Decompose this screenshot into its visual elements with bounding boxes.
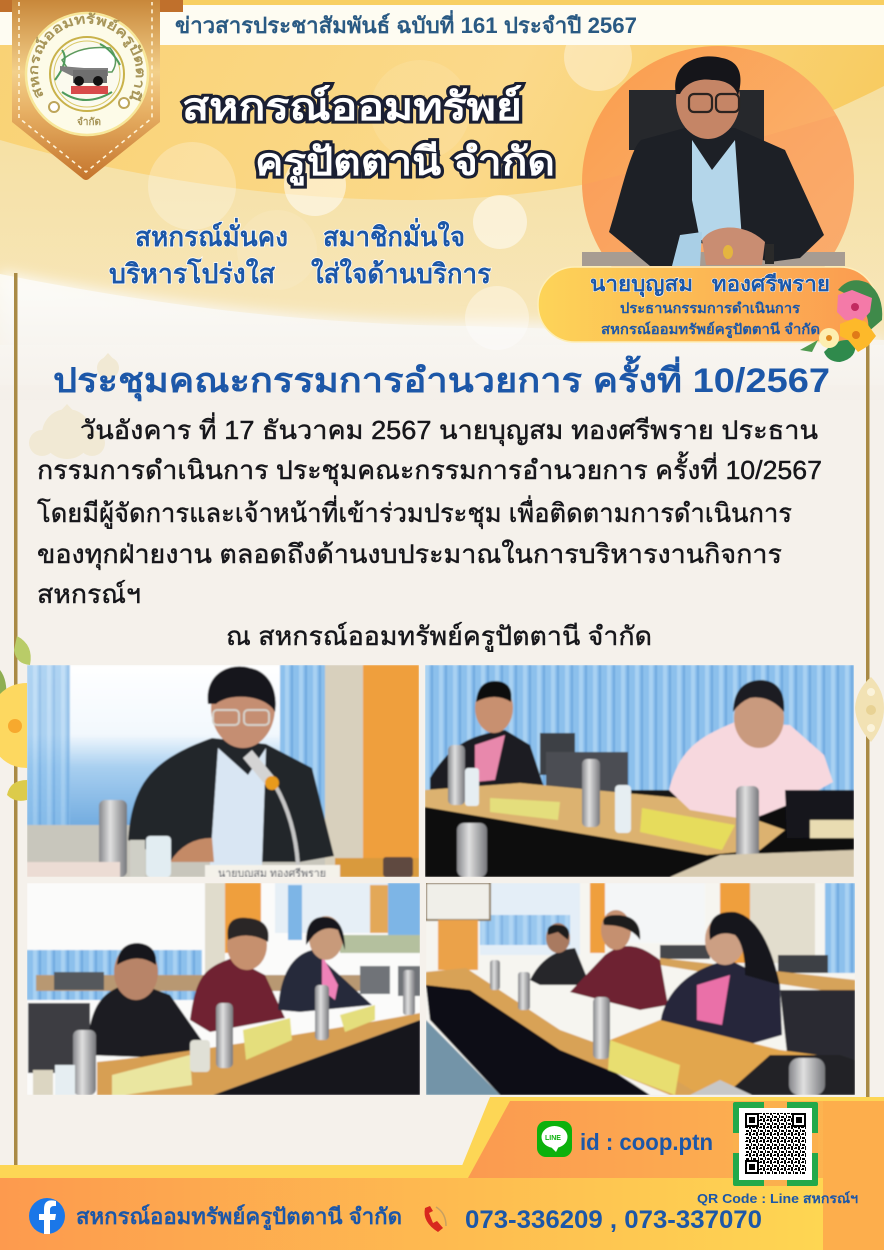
body paragraph: กรรมการดำเนินการ ประชุมคณะกรรมการอำนวยการ ครั้งที่ 10/2567 (37, 451, 822, 486)
slogans (109, 217, 491, 289)
main heading: สหกรณ์ออมทรัพย์ (182, 84, 522, 129)
photo 1: chairman speaking (27, 665, 419, 880)
photo 4: wide view of the table (426, 883, 855, 1095)
QR code (733, 1102, 818, 1186)
icon: tropical flowers (800, 280, 882, 362)
top strip with issue line (0, 0, 884, 45)
meeting title: ประชุมคณะกรรมการอำนวยการ ครั้งที่ 10/2567 (53, 355, 830, 402)
icon: LINE: LINE (545, 1135, 561, 1142)
icon: cooperative seal: สหกรณ์ออมทรัพย์ครูปัตตานี (30, 12, 144, 102)
ornament: faint Thai motifs (29, 353, 119, 459)
ribbon with logo (0, 0, 183, 180)
body paragraph: ของทุกฝ่ายงาน ตลอดถึงด้านงบประมาณในการบริหารงานกิจการ (37, 539, 782, 570)
main heading: ครูปัตตานี จำกัด (255, 141, 555, 186)
phone numbers: 073-336209 , 073-337070 (465, 1206, 762, 1234)
slogans: บริหารโปร่งใส (109, 257, 276, 289)
name pill: สหกรณ์ออมทรัพย์ครูปัตตานี จำกัด (601, 321, 820, 338)
footer: yellow band (0, 1097, 884, 1178)
icon: LINE (537, 1121, 572, 1157)
name pill: นายบุญสม ทองศรีพราย (590, 272, 830, 298)
photo 2: committee members at table (425, 665, 854, 877)
body paragraph: โดยมีผู้จัดการและเจ้าหน้าที่เข้าร่วมประชุม เพื่อติดตามการดำเนินการ (37, 495, 792, 529)
decoration: right ornament (855, 677, 884, 742)
icon: phone (425, 1206, 446, 1232)
slogans: สมาชิกมั่นใจ (323, 217, 465, 252)
slogans: ใส่ใจด้านบริการ (311, 258, 491, 289)
portrait of chairman (582, 46, 854, 266)
icon: Facebook (29, 1198, 65, 1234)
main heading (182, 84, 555, 186)
decoration: left flower (0, 636, 31, 801)
QR caption: QR Code : Line สหกรณ์ฯ (697, 1191, 858, 1206)
photo 3: three attendees (27, 883, 420, 1095)
venue line: ณ สหกรณ์ออมทรัพย์ครูปัตตานี จำกัด (226, 621, 652, 652)
line id: id : coop.ptn (580, 1129, 713, 1155)
body paragraph (37, 412, 822, 609)
name pill (538, 267, 877, 342)
slogans: สหกรณ์มั่นคง (135, 217, 288, 252)
name pill: ประธานกรรมการดำเนินการ (620, 300, 800, 316)
body paragraph: สหกรณ์ฯ (37, 579, 141, 609)
footer: upper orange panel (468, 1101, 884, 1178)
top strip with issue line: ข่าวสารประชาสัมพันธ์ ฉบับที่ 161 ประจำปี 2567 (175, 9, 637, 38)
facebook name: สหกรณ์ออมทรัพย์ครูปัตตานี จำกัด (76, 1204, 402, 1231)
footer: lower orange bar (0, 1101, 884, 1250)
header background (0, 0, 884, 400)
frame lines (14, 273, 870, 1165)
photo 1: chairman speaking: นายบุญสม ทองศรีพราย (218, 867, 326, 880)
body paragraph: วันอังคาร ที่ 17 ธันวาคม 2567 นายบุญสม ทองศรีพราย ประธาน (80, 412, 818, 446)
icon: cooperative seal: จำกัด (77, 116, 101, 128)
